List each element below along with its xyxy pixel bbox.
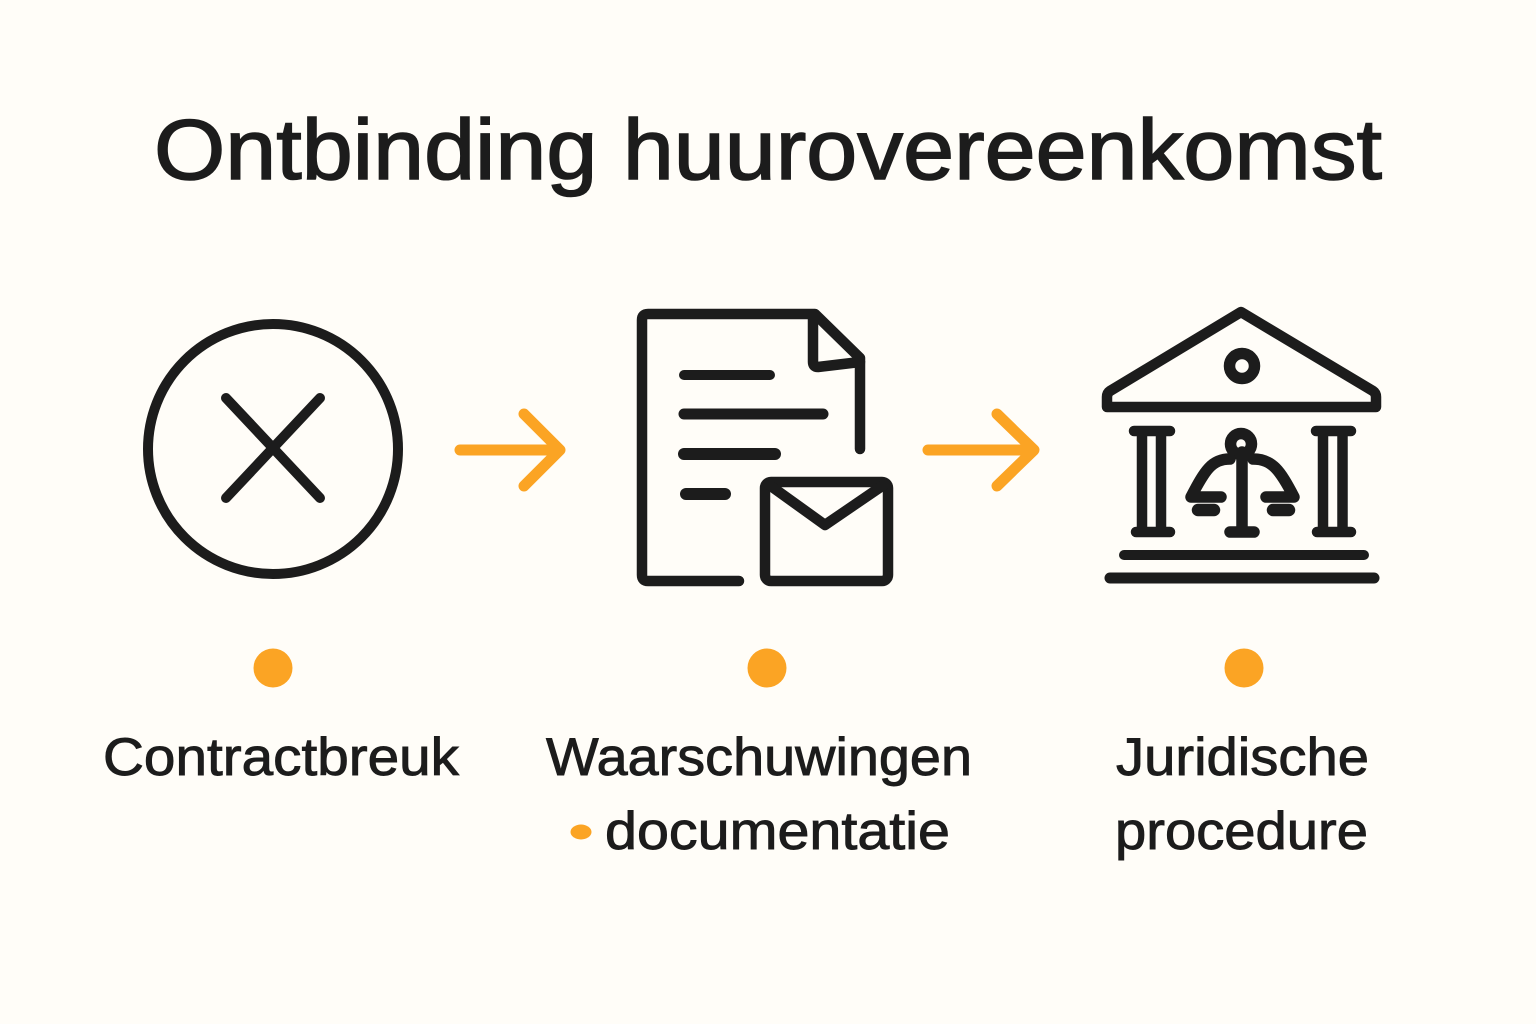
icon: courthouse with scales (1107, 312, 1376, 578)
label: Waarschuwingen documentatie (546, 728, 972, 861)
label: Juridische procedure (1115, 728, 1369, 861)
label: Juridische procedure: procedure (1115, 802, 1368, 861)
icon: circle with cross (148, 324, 398, 574)
step marker three (1224, 648, 1264, 688)
label: Waarschuwingen documentatie: documentatie (605, 802, 950, 861)
icon: document with envelope (642, 314, 888, 581)
step marker two (748, 648, 786, 688)
label: Juridische procedure: Juridische (1116, 728, 1369, 787)
label: Contractbreuk: Contractbreuk (103, 728, 460, 787)
title: Ontbinding huurovereenkomst (154, 103, 1382, 198)
arrow: step two to three (928, 414, 1034, 486)
arrow: step one to two (460, 414, 560, 486)
label: Waarschuwingen documentatie: Waarschuwingen (546, 728, 972, 787)
step marker one (254, 648, 292, 688)
